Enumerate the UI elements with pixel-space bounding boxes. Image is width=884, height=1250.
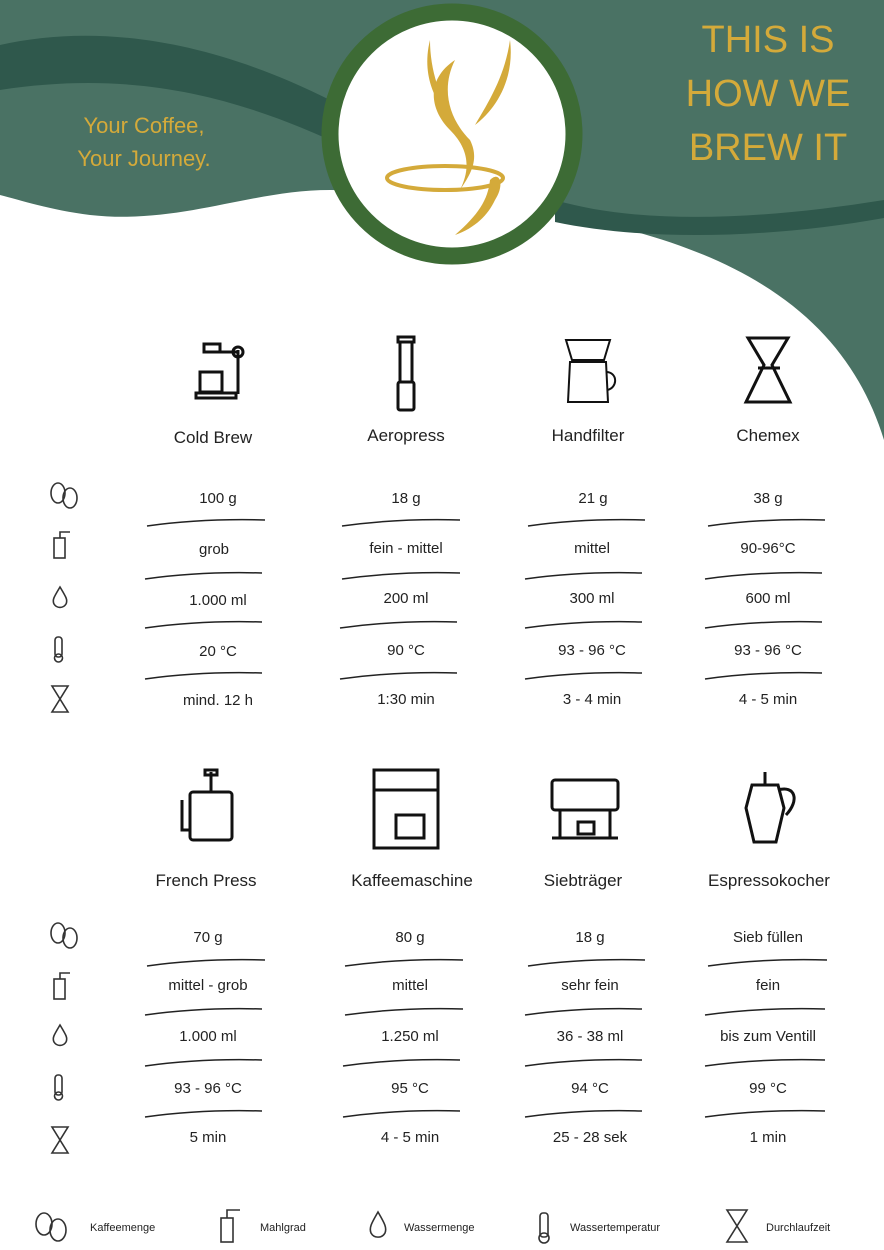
table row 1 values: 3 - 4 min [563, 691, 621, 708]
table row 2 values: 95 °C [391, 1080, 429, 1097]
logo circle [330, 12, 574, 256]
table row 1 values: 300 ml [569, 590, 615, 607]
row 2 names: Siebträger [544, 871, 623, 890]
row 1 names: Aeropress [367, 426, 445, 445]
table row 2 values: 70 g [193, 929, 223, 946]
table row 2 values: 99 °C [749, 1080, 787, 1097]
row 2 icons [182, 770, 794, 848]
row 1 icons [196, 337, 790, 410]
table row 1 values: 600 ml [745, 590, 791, 607]
title: HOW WE [686, 73, 850, 115]
table row 2 values: mittel - grob [168, 977, 248, 994]
table row 1 values: 21 g [578, 490, 608, 507]
table row 1 values: 93 - 96 °C [734, 642, 802, 659]
row 2 names: French Press [155, 871, 257, 890]
icon: kaffeemaschine [374, 770, 438, 848]
title [686, 19, 850, 169]
header background [0, 0, 884, 440]
row 1 names: Handfilter [552, 426, 625, 445]
table row 1 values: 20 °C [199, 643, 237, 660]
table row 1 values: 38 g [753, 490, 783, 507]
table row 2 values: fein [756, 977, 780, 994]
icon: cold brew [196, 344, 243, 398]
table row 1 values: 4 - 5 min [739, 691, 797, 708]
table row 1 values: 1:30 min [377, 691, 435, 708]
table row 2 values: 1.250 ml [381, 1028, 439, 1045]
table row 2 values: Sieb füllen [733, 929, 803, 946]
legend: Durchlaufzeit [766, 1222, 830, 1234]
table row 2 values: 5 min [190, 1129, 226, 1146]
table row 1 values: 93 - 96 °C [558, 642, 626, 659]
table row 1 values [183, 490, 802, 709]
left parameter icons row 1 [51, 483, 77, 712]
table row 1 values: 1.000 ml [189, 592, 247, 609]
table row 2 values [168, 929, 816, 1146]
table row 1 values: 18 g [391, 490, 421, 507]
table row 1 values: 90-96°C [740, 540, 796, 557]
table row 1 values: grob [199, 541, 229, 558]
legend [36, 1210, 830, 1243]
table row 1 values: mittel [574, 540, 610, 557]
table row 2 values: 1.000 ml [179, 1028, 237, 1045]
tagline: Your Journey. [77, 146, 211, 171]
icon: aeropress [398, 337, 414, 410]
table row 1 values: 90 °C [387, 642, 425, 659]
icon: french press [182, 770, 232, 840]
row 1 names: Cold Brew [174, 428, 253, 447]
icon: handfilter [566, 340, 615, 402]
table row 2 values: 36 - 38 ml [557, 1028, 623, 1045]
icon: siebträger [552, 780, 618, 838]
table row 1 values: fein - mittel [369, 540, 443, 557]
table row 2 values: 4 - 5 min [381, 1129, 439, 1146]
row 2 names: Espressokocher [708, 871, 830, 890]
row 1 dividers [145, 520, 825, 679]
table row 2 values: bis zum Ventill [720, 1028, 816, 1045]
legend: Wassermenge [404, 1222, 475, 1234]
row 2 dividers [145, 960, 827, 1117]
icon: espressokocher [746, 772, 794, 842]
legend: Wassertemperatur [570, 1222, 660, 1234]
title: THIS IS [701, 19, 835, 61]
table row 2 values: 80 g [395, 929, 425, 946]
table row 2 values: 18 g [575, 929, 605, 946]
title: BREW IT [689, 127, 847, 169]
row 2 names [155, 871, 830, 890]
tagline: Your Coffee, [83, 113, 205, 138]
icon: chemex [746, 338, 790, 402]
table row 1 values: 100 g [199, 490, 237, 507]
row 2 names: Kaffeemaschine [351, 871, 473, 890]
table row 1 values: mind. 12 h [183, 692, 253, 709]
left parameter icons row 2 [51, 923, 77, 1153]
tagline [77, 113, 211, 171]
legend: Kaffeemenge [90, 1222, 155, 1234]
table row 2 values: 93 - 96 °C [174, 1080, 242, 1097]
row 1 names: Chemex [736, 426, 800, 445]
table row 1 values: 200 ml [383, 590, 429, 607]
table row 2 values: 94 °C [571, 1080, 609, 1097]
table row 2 values: sehr fein [561, 977, 619, 994]
table row 2 values: 25 - 28 sek [553, 1129, 628, 1146]
row 1 names [174, 426, 800, 447]
table row 2 values: 1 min [750, 1129, 786, 1146]
table row 2 values: mittel [392, 977, 428, 994]
legend: Mahlgrad [260, 1222, 306, 1234]
